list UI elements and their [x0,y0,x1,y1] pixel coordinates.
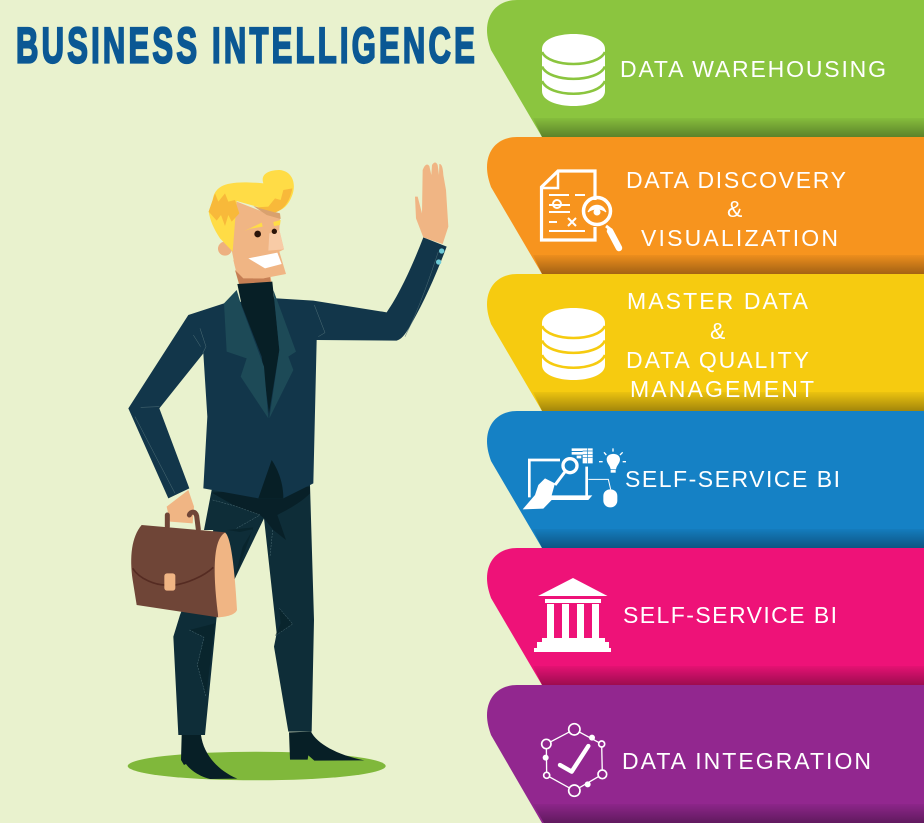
label: & [727,196,742,222]
trouser stitching [189,500,293,697]
label: & [710,318,725,344]
smile [248,253,282,268]
hand [167,490,194,523]
icon: database [542,34,605,106]
label: SELF-SERVICE BI [625,466,840,492]
panel: self-service bi (pink) [487,548,924,685]
panel: self-service bi (blue) [487,411,924,548]
trouser shading [212,487,310,540]
label [626,167,846,251]
neck [233,260,272,285]
legs and briefcase [131,485,364,779]
turtleneck shirt [237,282,279,413]
panel: data warehousing [487,0,924,137]
briefcase [131,512,237,617]
lapels [224,290,268,418]
icon: hexagon check [542,724,607,796]
panel: data integration [487,685,924,823]
label [626,288,814,402]
label: DATA QUALITY [626,347,809,373]
icon: database [542,308,605,380]
label: MANAGEMENT [630,376,814,402]
businessman figure [128,162,448,779]
face [232,202,286,278]
label: MASTER DATA [627,288,809,314]
icon: bank building [534,578,611,652]
jacket stitching [135,252,438,493]
panel: master data and data quality management [487,274,924,411]
ground ellipse [128,752,386,780]
trousers [173,485,314,735]
title: BUSINESS INTELLIGENCE [16,17,475,73]
nose [268,230,284,251]
eyebrows [244,220,281,231]
jacket [128,237,447,498]
icon: document with magnifier [542,171,619,248]
raised hand [415,162,448,244]
torso and head [128,162,448,498]
label: VISUALIZATION [641,225,838,251]
panel: data discovery and visualization [487,137,924,274]
cuff buttons [436,248,444,265]
shoes [181,735,237,779]
label: DATA DISCOVERY [626,167,846,193]
eyes [254,231,261,237]
label: SELF-SERVICE BI [623,602,837,628]
ear [218,242,232,256]
hair [209,170,294,252]
icon: laptop, search and mouse [523,448,626,509]
label: DATA WAREHOUSING [620,56,886,82]
label: DATA INTEGRATION [622,748,871,774]
